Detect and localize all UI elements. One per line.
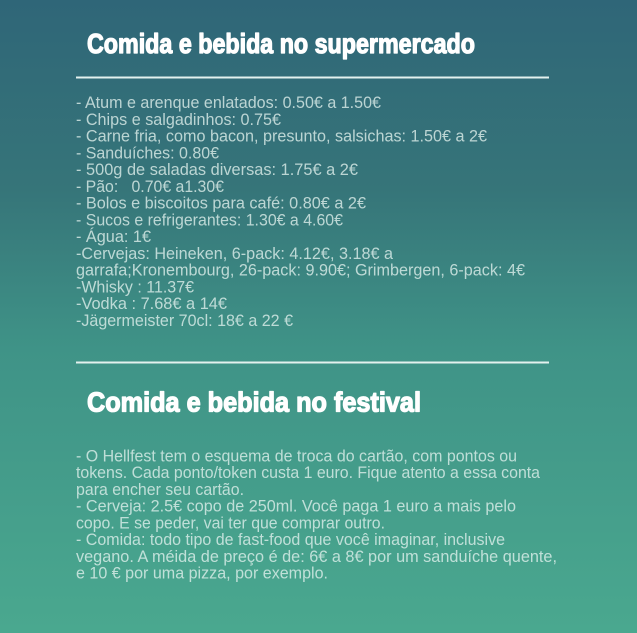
text block: supermarket price list: garrafa;Kronembourg, 26-pack: 9.90€; Grimbergen, 6-pack: 4€ — [76, 260, 526, 280]
text block: festival information: copo. E se peder, vai ter que comprar outro. — [76, 514, 385, 532]
text block: festival information: e 10 € por uma pizza, por exemplo. — [76, 564, 328, 582]
text block: supermarket price list: -Whisky : 11.37€ — [76, 278, 195, 296]
text block: festival information: tokens. Cada ponto/token custa 1 euro. Fique atento a essa conta — [76, 463, 541, 482]
panel: supermarket food and drink — [76, 28, 549, 330]
text block: supermarket price list: -Jägermeister 70cl: 18€ a 22 € — [76, 311, 294, 330]
text block: supermarket price list: - Carne fria, como bacon, presunto, salsichas: 1.50€ a 2€ — [76, 126, 488, 146]
text block: supermarket price list: - Sucos e refrigerantes: 1.30€ a 4.60€ — [76, 210, 344, 230]
text block: supermarket price list: - Atum e arenque enlatados: 0.50€ a 1.50€ — [76, 93, 382, 112]
heading: festival: Comida e bebida no festival — [87, 386, 421, 418]
text block: supermarket price list: - Chips e salgadinhos: 0.75€ — [76, 110, 282, 129]
text block: supermarket price list — [76, 93, 526, 330]
text block: supermarket price list: - Água: 1€ — [76, 227, 152, 246]
text block: festival information: - Cerveja: 2.5€ copo de 250ml. Você paga 1 euro a mais pelo — [76, 496, 516, 516]
text block: supermarket price list: -Vodka : 7.68€ a 14€ — [76, 294, 228, 313]
text block: supermarket price list: - 500g de saladas diversas: 1.75€ a 2€ — [76, 160, 359, 179]
text block: supermarket price list: - Bolos e biscoitos para café: 0.80€ a 2€ — [76, 194, 367, 212]
panel: festival food and drink — [76, 362, 557, 582]
text block: supermarket price list: - Pão: 0.70€ a1.30€ — [76, 177, 224, 196]
text block: festival information: vegano. A méida de preço é de: 6€ a 8€ por um sanduíche quente, — [76, 547, 557, 566]
text block: supermarket price list: -Cervejas: Heineken, 6-pack: 4.12€, 3.18€ a — [76, 244, 394, 263]
text block: festival information: para encher seu cartão. — [76, 480, 244, 499]
text block: festival information — [76, 446, 557, 582]
text block: festival information: - O Hellfest tem o esquema de troca do cartão, com pontos ou — [76, 446, 517, 466]
text block: festival information: - Comida: todo tipo de fast-food que você imaginar, inclusive — [76, 530, 505, 549]
heading: supermarket: Comida e bebida no supermercado — [87, 28, 475, 59]
text block: supermarket price list: - Sanduíches: 0.80€ — [76, 144, 220, 162]
